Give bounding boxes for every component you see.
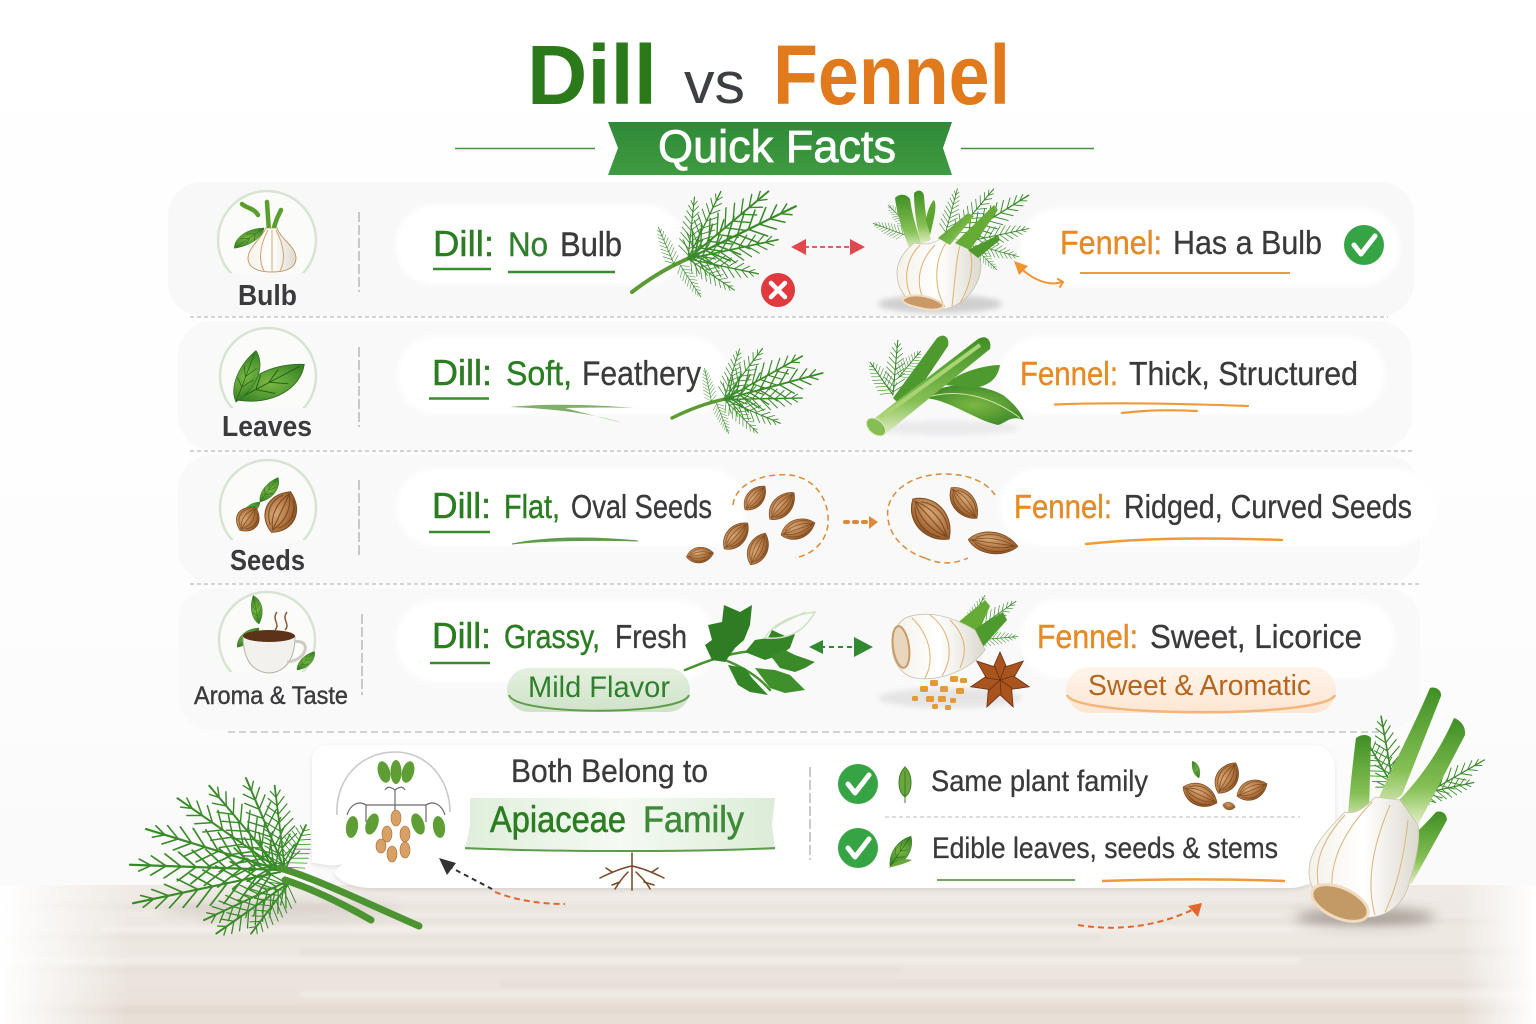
illustration: fennel stalks [862, 336, 1024, 439]
text: dill grassy fresh: Fresh [615, 618, 687, 655]
text: fennel sweet licorice [1037, 618, 1362, 655]
text: dill soft feathery: Soft, [506, 355, 572, 393]
text: fennel ridged curved seeds [1014, 488, 1412, 544]
text: dill flat oval seeds [429, 485, 712, 544]
title: Dill [527, 28, 657, 122]
panel: aroma row [178, 588, 1420, 732]
subtitle ribbon: Quick Facts [455, 121, 1094, 175]
ribbon: Apiaceae Family: Apiaceae [490, 799, 626, 840]
icon: check two [838, 828, 878, 868]
arrow: to check list [1078, 903, 1202, 928]
text: dill grassy fresh: Dill: [432, 615, 491, 656]
ribbon: Apiaceae Family [465, 798, 775, 851]
illustration: small seeds [1178, 758, 1271, 813]
text: dill flat oval seeds: Dill: [432, 485, 491, 526]
label: Aroma and Taste: Aroma & Taste [194, 682, 348, 710]
text: fennel has a bulb [1060, 224, 1322, 273]
icon: leaf sprig [884, 836, 918, 868]
panel: seeds row [178, 455, 1435, 584]
text: fennel thick structured: Fennel: [1020, 355, 1118, 392]
label: Leaves: Leaves [222, 411, 312, 443]
icon: bulb [216, 190, 318, 274]
illustration: dill sprig [604, 152, 821, 338]
icon: small leaf [899, 767, 911, 803]
arrow: orange curved [1014, 261, 1063, 287]
text: dill flat oval seeds: Flat, [504, 488, 560, 525]
text: same plant family: Same plant family [931, 765, 1148, 798]
arrow: dill to fennel [791, 239, 865, 255]
panel: bulb row [190, 188, 1388, 318]
text: dill no bulb: Bulb [560, 226, 622, 264]
illustration: fennel and star anise [878, 592, 1031, 710]
text: fennel sweet licorice: Fennel: [1037, 618, 1138, 655]
text: dill no bulb [433, 223, 622, 272]
text: dill soft feathery [429, 352, 701, 423]
icon: leaves [218, 326, 318, 408]
wooden table [0, 885, 1536, 1024]
title [527, 28, 1010, 122]
text: fennel ridged curved seeds: Fennel: [1014, 488, 1112, 525]
icon: seeds [218, 458, 318, 540]
text: edible leaves seeds stems: Edible leaves, seeds & stems [932, 832, 1278, 865]
panel: family card [312, 745, 1335, 890]
panel: leaves row [190, 326, 1412, 452]
text: dill no bulb: No [508, 226, 548, 264]
label: Bulb: Bulb [238, 280, 297, 312]
ribbon: Apiaceae Family: Family [643, 799, 744, 840]
title: vs [684, 51, 745, 116]
icon: family tree [337, 752, 450, 862]
text: fennel thick structured: Thick, Structured [1129, 355, 1358, 392]
subtitle ribbon: Quick Facts: Quick Facts [658, 121, 896, 172]
text: dill flat oval seeds: Oval Seeds [571, 488, 712, 525]
icon: red cross [761, 273, 795, 307]
illustration: dill seeds [685, 475, 828, 569]
illustration: large dill [129, 771, 419, 949]
illustration: parsley [685, 605, 815, 695]
text: dill grassy fresh: Grassy, [504, 618, 600, 655]
icon: green check [1344, 225, 1384, 265]
badge: sweet and aromatic: Sweet & Aromatic [1088, 670, 1311, 702]
badge: sweet and aromatic [1066, 667, 1336, 713]
label: Seeds: Seeds [230, 545, 305, 577]
text: fennel has a bulb: Fennel: [1060, 224, 1162, 261]
illustration: large fennel [1295, 687, 1490, 929]
text: dill grassy fresh [430, 615, 687, 663]
illustration: fennel bulb [871, 182, 1035, 313]
text: dill soft feathery: Dill: [432, 352, 492, 393]
badge: mild flavor [507, 668, 690, 712]
text: dill no bulb: Dill: [433, 223, 494, 264]
text: dill soft feathery: Feathery [582, 355, 701, 393]
illustration: fennel seeds [888, 474, 1019, 563]
text: fennel thick structured [1020, 355, 1358, 413]
icon: check one [838, 764, 878, 804]
arrow: dotted seeds [845, 516, 878, 529]
title: Fennel [773, 28, 1010, 122]
illustration: dill sprig [657, 323, 836, 461]
icon: cup [218, 590, 316, 674]
text: both belong to: Both Belong to [511, 753, 708, 789]
badge: mild flavor: Mild Flavor [528, 671, 670, 704]
text: fennel sweet licorice: Sweet, Licorice [1150, 618, 1362, 655]
arrow: to family tree [439, 858, 565, 904]
arrow: green dashed [809, 637, 873, 657]
icon: roots [600, 853, 664, 890]
text: fennel ridged curved seeds: Ridged, Curved Seeds [1124, 488, 1412, 525]
text: fennel has a bulb: Has a Bulb [1173, 224, 1322, 261]
